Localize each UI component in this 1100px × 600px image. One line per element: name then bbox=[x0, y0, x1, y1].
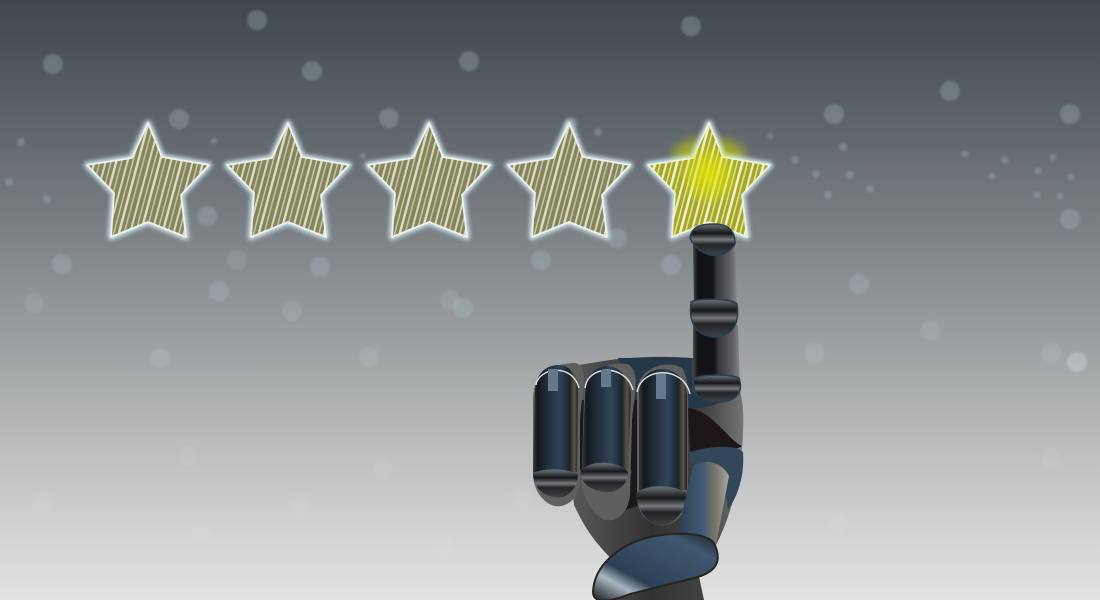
index fingertip bbox=[690, 224, 735, 255]
finger 1 bbox=[533, 363, 584, 506]
thumb tip bbox=[593, 534, 718, 600]
palm blue knuckle band bbox=[618, 358, 740, 408]
index base joint bbox=[694, 375, 740, 402]
finger 3 bbox=[637, 364, 690, 526]
star 5 highlighted bbox=[648, 123, 770, 237]
index segment lower bbox=[693, 325, 740, 392]
dark gaps between fingers bbox=[578, 400, 640, 510]
palm reflection bbox=[688, 408, 742, 452]
star 1 bbox=[87, 123, 209, 237]
index segment upper bbox=[693, 240, 737, 310]
palm bbox=[560, 357, 743, 600]
star 3 bbox=[368, 123, 490, 237]
index middle joint bbox=[690, 299, 738, 337]
star 4 bbox=[508, 123, 630, 237]
robot hand bbox=[533, 224, 743, 600]
thumb upper segment bbox=[676, 462, 729, 545]
finger 2 bbox=[581, 364, 636, 520]
index finger bbox=[690, 224, 740, 402]
star rating row bbox=[87, 123, 770, 237]
star 2 bbox=[227, 123, 349, 237]
